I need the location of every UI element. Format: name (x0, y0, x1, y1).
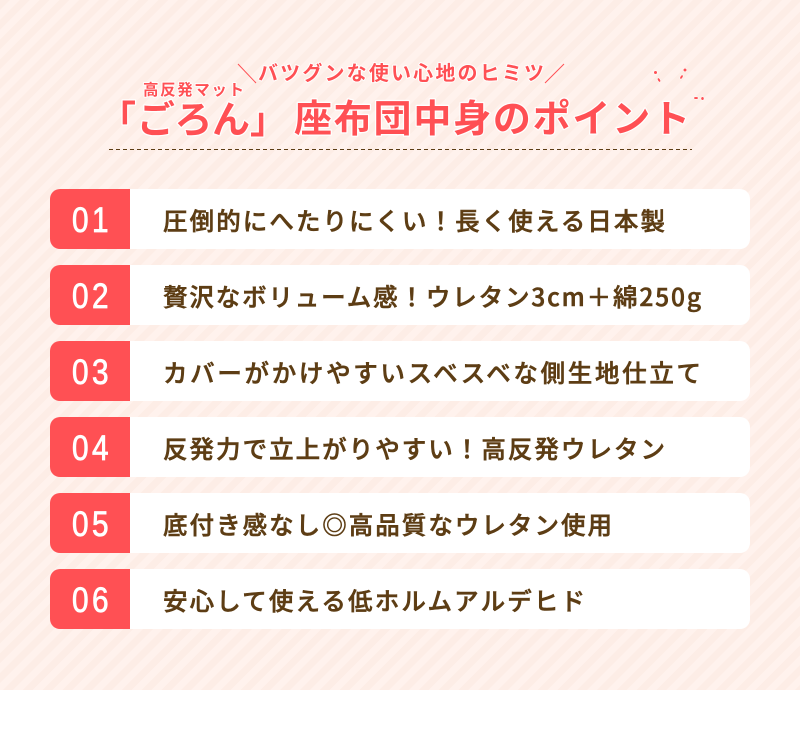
sparkle marks (654, 68, 704, 100)
point 04: 04 (72, 429, 112, 468)
point 04: 反発力で立上がりやすい！高反発ウレタン (163, 431, 665, 466)
point 03 (50, 341, 750, 401)
point 05 (50, 493, 750, 553)
main title: 座布団中身のポイント (294, 99, 690, 141)
point 01: 圧倒的にへたりにくい！長く使える日本製 (163, 203, 665, 238)
point 05: 05 (72, 505, 112, 544)
point 01 (50, 189, 750, 249)
point 03: 03 (72, 353, 112, 392)
header block (99, 61, 704, 150)
subheading with slashes: バツグンな使い心地のヒミツ (258, 61, 544, 85)
dashed divider (109, 148, 692, 150)
point 05: 底付き感なし◎高品質なウレタン使用 (163, 507, 612, 542)
point 02 (50, 265, 750, 325)
main title: ごろん (137, 100, 250, 142)
point 02: 贅沢なボリューム感！ウレタン3cm＋綿250g (163, 279, 701, 314)
point 04 (50, 417, 750, 477)
point 01: 01 (72, 201, 112, 240)
point 02: 02 (72, 277, 112, 316)
main title: 」 (250, 100, 287, 141)
point 06: 06 (72, 581, 112, 620)
point 06: 安心して使える低ホルムアルデヒド (163, 583, 585, 618)
point 03: カバーがかけやすいスベスベな側生地仕立て (163, 355, 701, 390)
main title: 「 (99, 99, 136, 140)
point 06 (50, 569, 750, 629)
ruby label: 高反発マット (143, 81, 244, 99)
main title (99, 99, 690, 142)
